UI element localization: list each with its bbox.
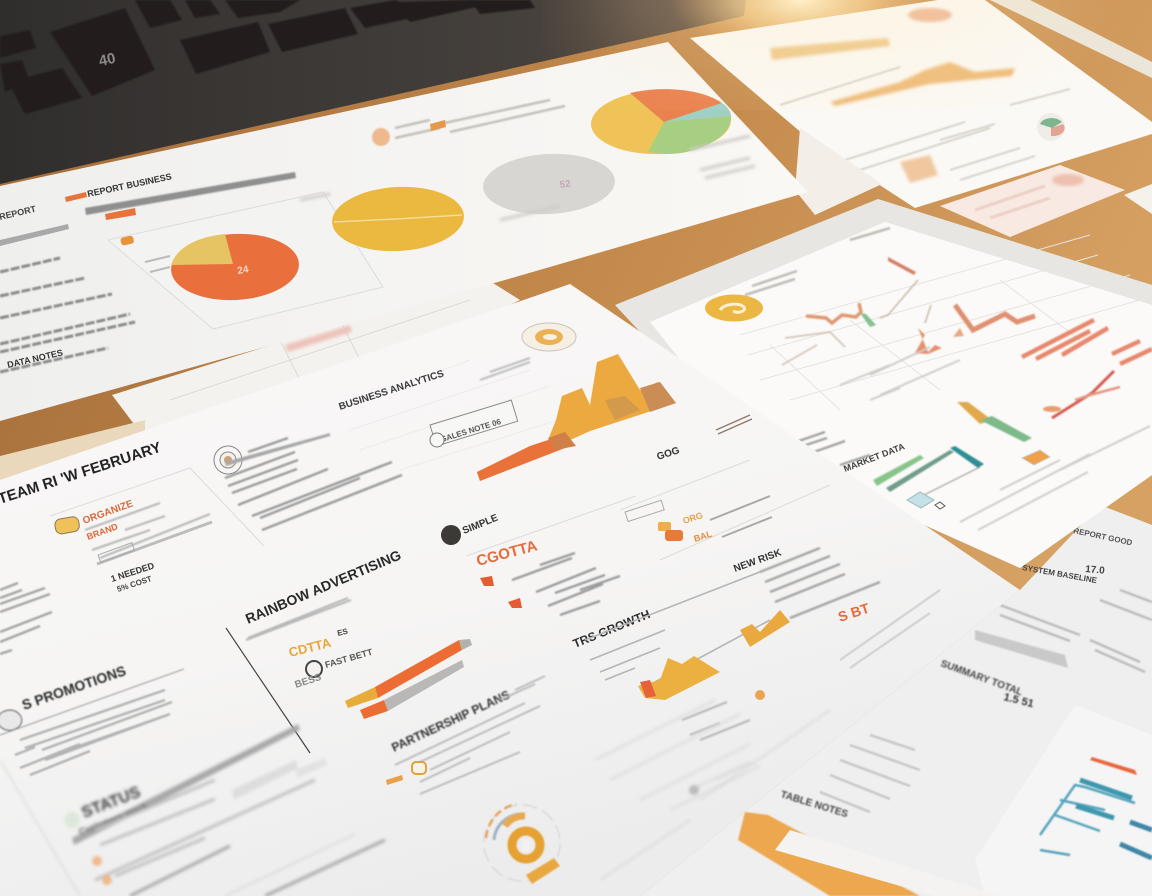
bottom right headings: 17.0: [1085, 564, 1106, 577]
orange ribbon: [738, 812, 920, 896]
panel: yellow rising bar chart: BUSINESS ANALYTICS: [338, 368, 446, 413]
main heading: TEAM RI 'W FEBRUARY: [0, 439, 163, 508]
pie chart: grey: [482, 151, 616, 217]
panel: yellow rising bar chart: [338, 354, 676, 481]
warm light glow: [670, 0, 930, 60]
bottom right headings: REPORT GOOD: [1073, 526, 1133, 547]
panel: orange list: [50, 468, 264, 594]
panel: orange list: BRAND: [85, 521, 120, 542]
panel: orange list: 5% COST: [116, 574, 153, 594]
panel: circle icon list: [212, 433, 402, 530]
chart captions: [745, 228, 1150, 530]
lighting overlay: [590, 0, 1070, 90]
top ring icon: [522, 323, 576, 351]
panel: black icon list: CGOTTA: [475, 537, 539, 570]
paper: strip below the top report: [795, 128, 882, 215]
right panel with blue chart: [975, 705, 1152, 896]
panel: lower left blurred stats: Customers reach: [77, 801, 149, 837]
panel: small orange chips: BAL: [693, 529, 714, 544]
panel: orange list: 1 NEEDED: [110, 560, 156, 584]
paper: underlying sheet with table: [112, 278, 520, 432]
bottom right headings: 1.5 51: [1002, 691, 1035, 710]
orange line chart: [782, 257, 1035, 365]
panel: list at right: [732, 547, 940, 668]
panel: list at right: S BT: [836, 600, 872, 625]
pie chart: yellow: [330, 184, 466, 254]
panel: bars with divider: BESS: [294, 672, 323, 691]
yellow green bar: [957, 402, 1032, 442]
panel: small orange chips: ORG: [682, 510, 704, 526]
bottom right headings: SUMMARY TOTAL: [939, 658, 1024, 698]
panel: lower left blurred stats: STATUS: [79, 784, 143, 822]
section heading: REPORT BUSINESS: [86, 171, 173, 199]
panel: list at right: NEW RISK: [732, 547, 784, 575]
bottom right headings: TABLE NOTES: [779, 789, 849, 820]
left text column: DATA NOTES: [6, 347, 64, 370]
panel: bars with divider: FAST BETT: [324, 647, 374, 670]
panel: small orange chips: [620, 460, 830, 560]
red trend line: [1043, 371, 1120, 418]
lower right blurred text: [595, 700, 760, 810]
pie chart: orange: [169, 231, 301, 303]
lower right blurred icon: [600, 710, 830, 880]
panel: lower left blurred stats: [0, 724, 385, 896]
pie chart: orange: 24: [237, 264, 250, 277]
bottom right headings: SYSTEM BASELINE: [1022, 563, 1098, 585]
small orange badge: [1022, 450, 1050, 465]
side text lines: [300, 136, 755, 220]
pie chart: grey: 52: [559, 178, 572, 191]
left text column: [0, 204, 135, 372]
green and teal bars: [873, 446, 984, 502]
paper: mid right with line charts: [615, 199, 1152, 568]
top centre icon and caption: [372, 100, 565, 146]
keyboard: 40: [97, 50, 117, 70]
panel: yellow rising bar chart: SALES NOTE 06: [440, 417, 503, 444]
light blue square: [907, 492, 934, 508]
panel: bars with divider: RAINBOW ADVERTISING: [243, 547, 403, 627]
paper: corner scrap right: [1124, 184, 1152, 214]
paper: top band with pie charts: [0, 42, 808, 421]
yellow swirl logo: [705, 294, 763, 322]
panel: middle lower text: PARTNERSHIP PLANS: [389, 688, 512, 755]
small orange label: [120, 235, 170, 272]
chart gridlines: [740, 235, 1140, 410]
panel: small yellow bar charts: TRS GROWTH: [571, 607, 652, 651]
pie chart: multicolour: [590, 88, 732, 156]
paper: top right report: [690, 0, 1152, 208]
paper: bottom right report: [640, 505, 1152, 896]
short rules and glyph: GOG: [656, 445, 681, 463]
paper: small pink note: [940, 165, 1125, 237]
panel: bars with divider: CDTTA: [287, 635, 333, 660]
orange swirl target icon: [484, 804, 560, 884]
panel: bars with divider: [226, 547, 472, 753]
red diagonal bars: [1022, 320, 1152, 364]
panel: middle lower text: [386, 676, 545, 794]
panel: bars with divider: ES: [336, 626, 349, 638]
panel: lower left list: S PROMOTIONS: [20, 662, 128, 713]
short rules and glyph: [656, 415, 752, 463]
bottom right headings: [779, 526, 1152, 820]
chart captions: MARKET DATA: [842, 441, 907, 474]
cream sheet edge behind main sheet: [0, 420, 145, 482]
panel: lower left list: [0, 662, 184, 775]
panel: small yellow bar charts: [571, 570, 790, 740]
paper: main foreground sheet: [0, 284, 1020, 896]
panel: black icon list: [441, 496, 636, 615]
section heading: [65, 171, 296, 220]
keyboard: [0, 0, 746, 184]
left small text column: [0, 583, 52, 654]
panel: orange list: ORGANIZE: [81, 498, 135, 527]
blue tree chart: [1040, 757, 1152, 858]
panel outline: [108, 192, 383, 329]
panel: black icon list: SIMPLE: [461, 513, 500, 537]
